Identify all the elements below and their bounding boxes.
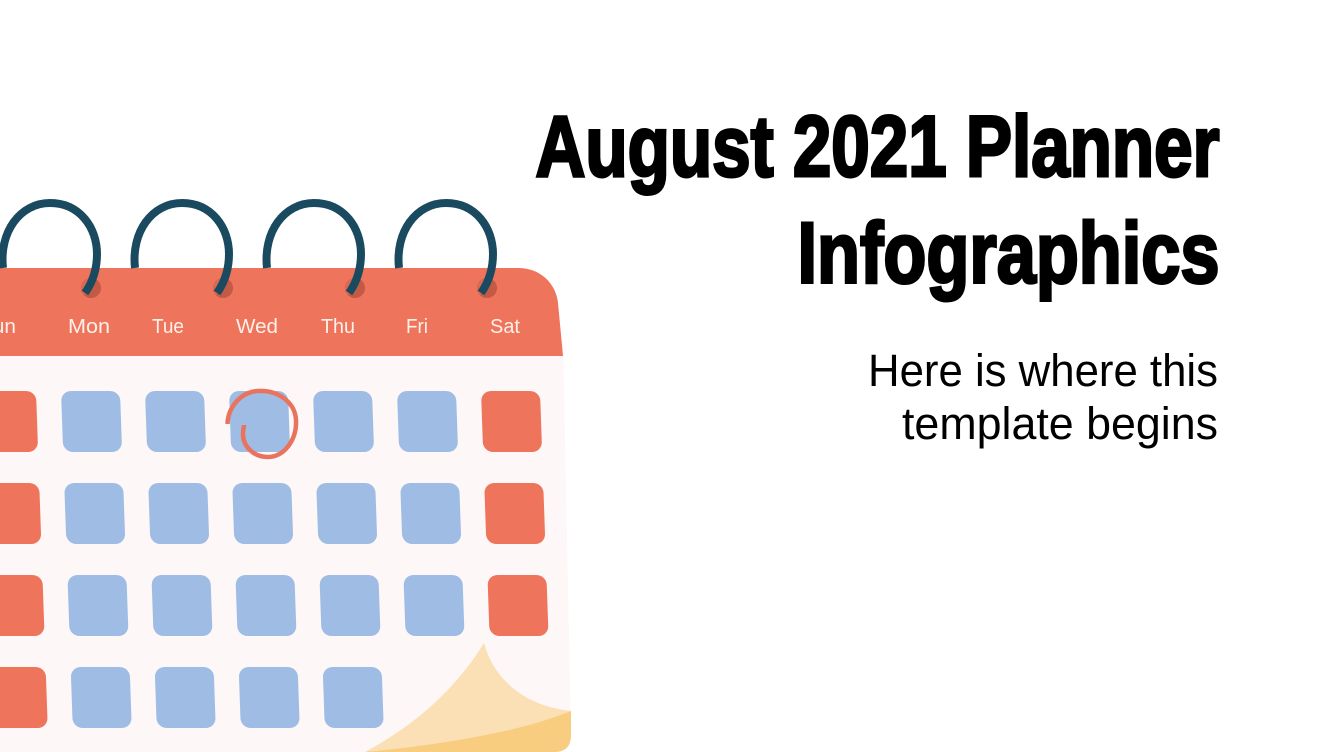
binder holes [81, 278, 497, 298]
hand-drawn circle on Wednesday [228, 391, 296, 457]
weekday labels: Fri [406, 316, 428, 338]
weekday labels: Sat [490, 316, 520, 338]
day squares row 2 [0, 483, 545, 544]
weekday labels: Tue [152, 316, 184, 338]
subtitle: template begins [902, 398, 1218, 449]
day squares grid [0, 391, 552, 728]
day squares row 3 [0, 575, 549, 636]
weekday labels: Mon [68, 316, 110, 338]
calendar page body [0, 340, 571, 752]
title [536, 99, 1220, 302]
calendar header band [0, 268, 563, 356]
binder rings [3, 203, 493, 293]
weekday labels: Thu [321, 316, 355, 338]
weekday labels [0, 316, 520, 338]
curled page corner [365, 643, 571, 752]
title: Infographics [798, 206, 1220, 302]
day squares row 4 [0, 667, 384, 728]
day squares row 1 [0, 391, 542, 452]
subtitle: Here is where this [868, 345, 1218, 396]
weekday labels: Wed [236, 316, 278, 338]
subtitle [868, 345, 1218, 449]
calendar illustration [0, 203, 571, 752]
